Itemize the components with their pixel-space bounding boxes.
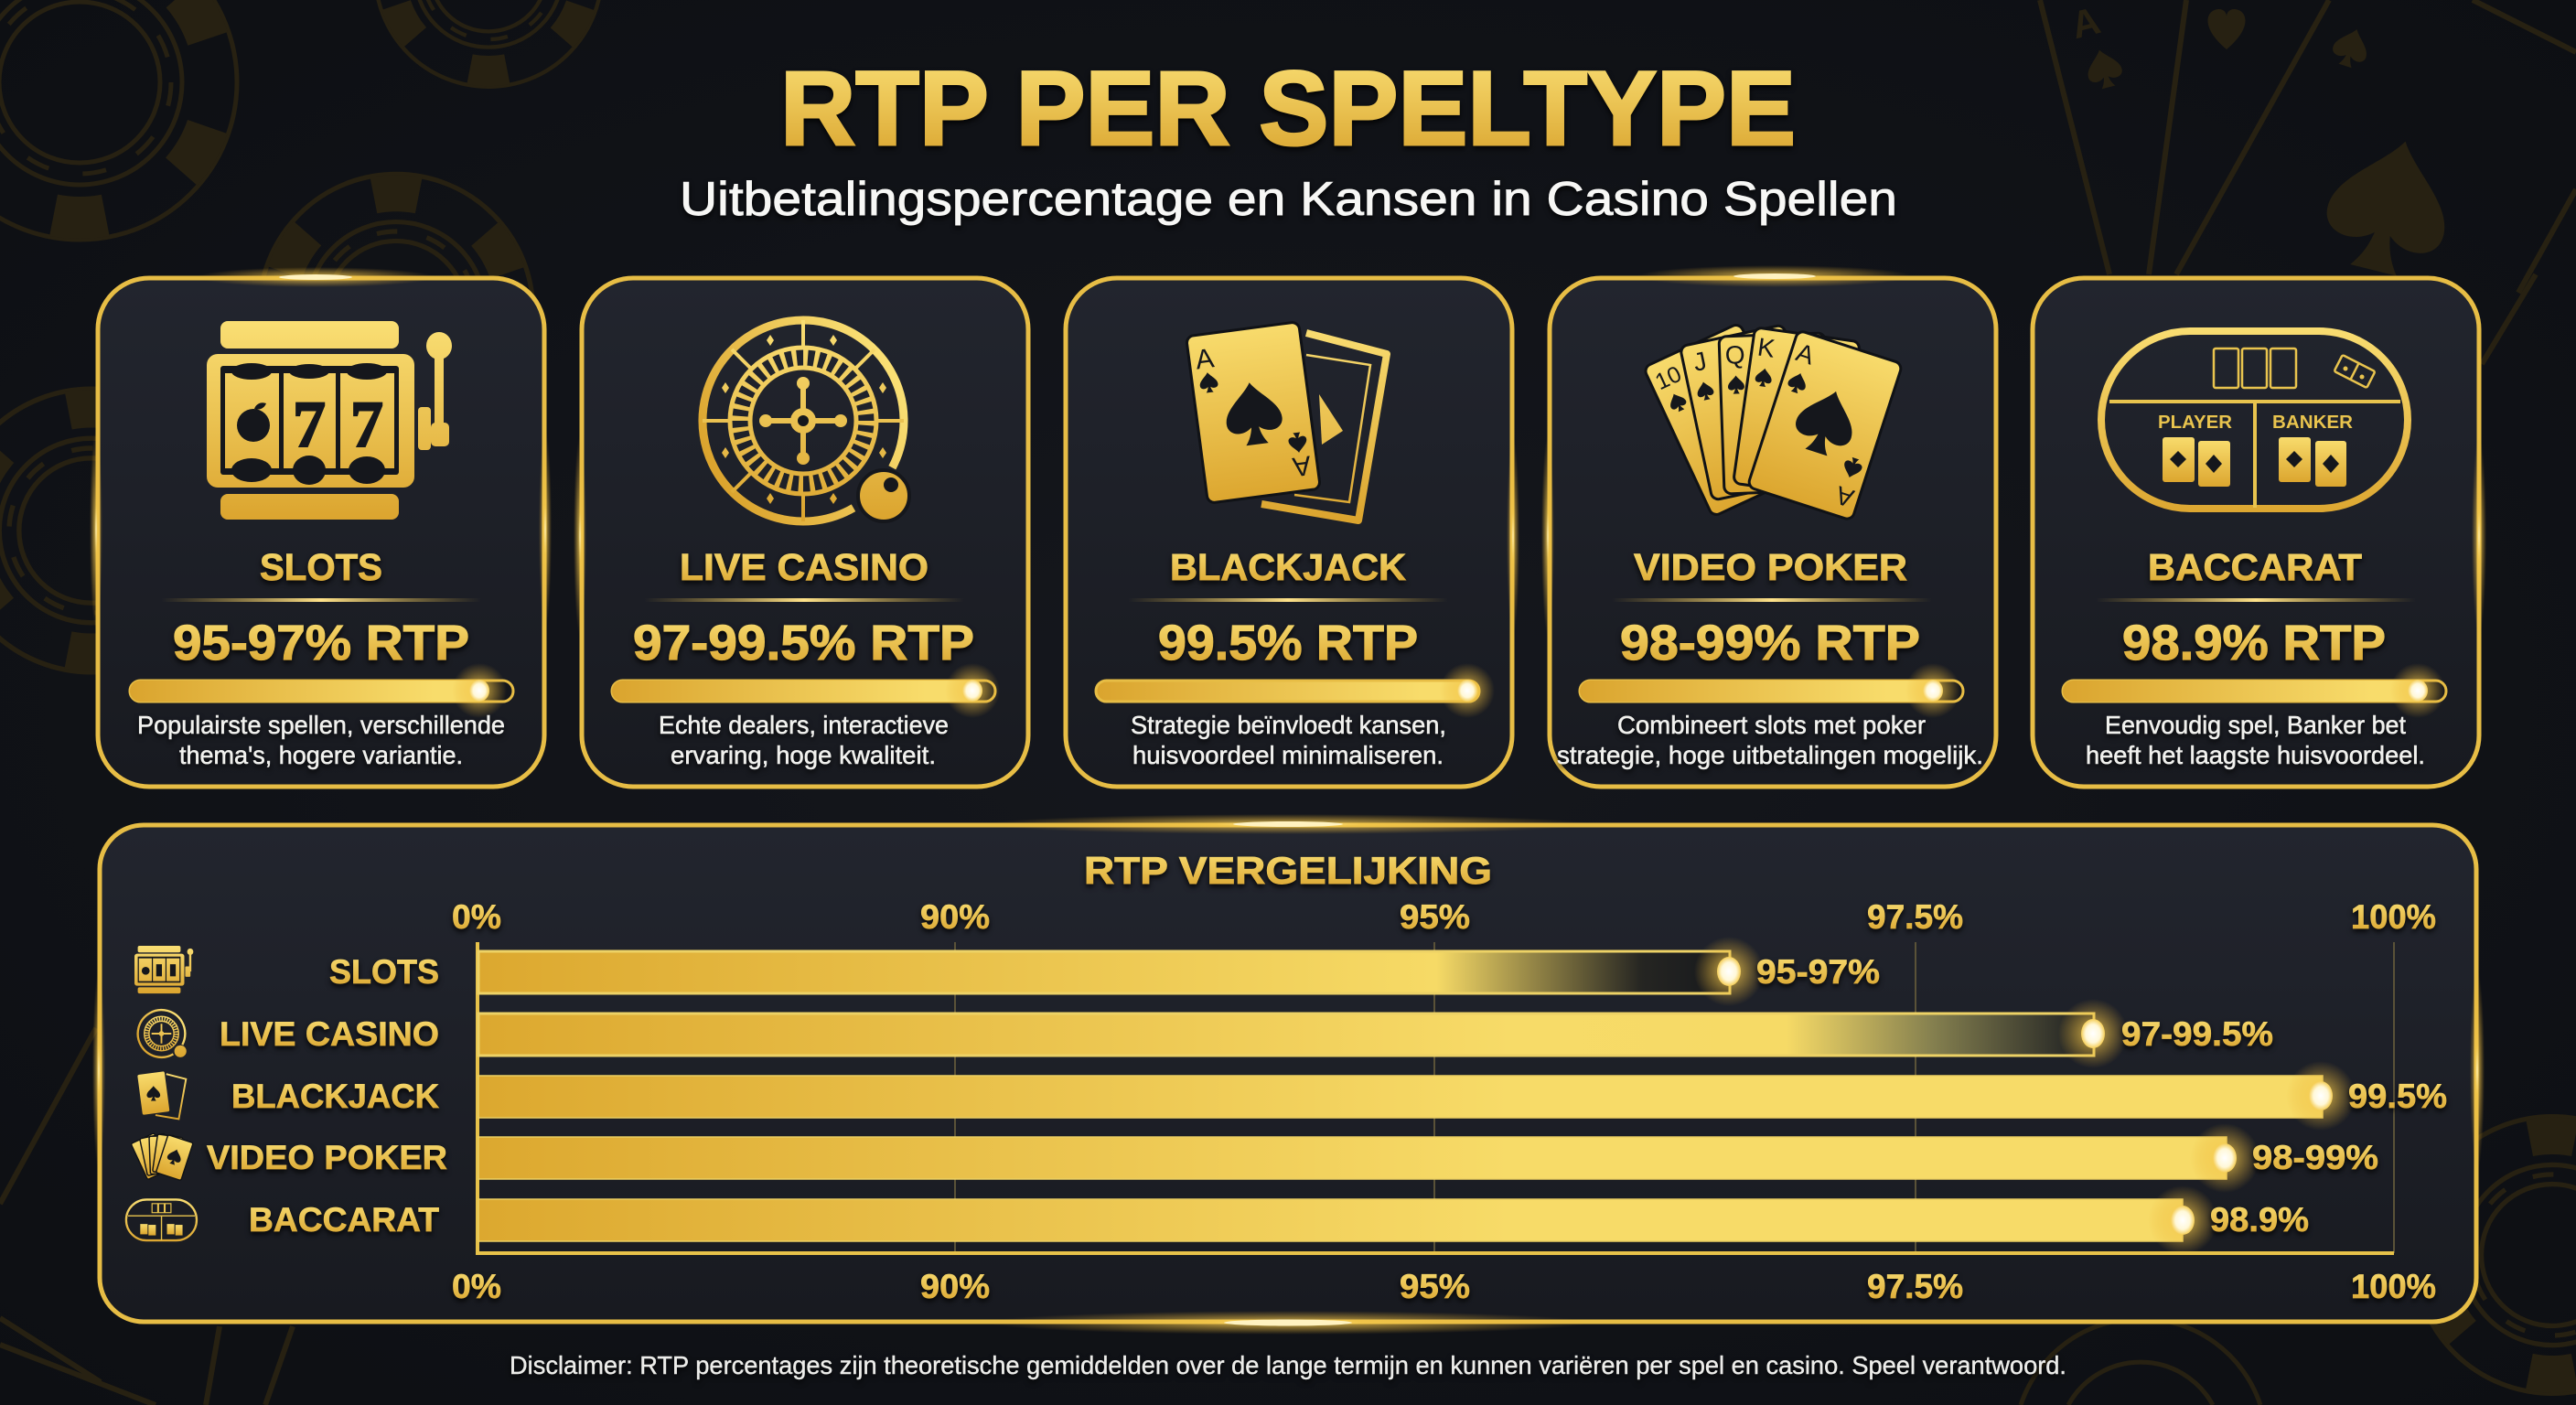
icon: baccarat table: BANKER [2272, 413, 2354, 433]
icon: baccarat table [2101, 331, 2408, 509]
bar value labels: 99.5% [2348, 1078, 2447, 1115]
description: Echte dealers, interactieve [659, 711, 949, 739]
top axis labels: 95% [1400, 898, 1470, 936]
chart title: RTP VERGELIJKING [1084, 849, 1492, 892]
top axis labels: 97.5% [1867, 898, 1963, 936]
description: strategie, hoge uitbetalingen mogelijk. [1557, 741, 1983, 769]
icon: poker hand [1643, 323, 1903, 520]
game name: SLOTS [260, 546, 382, 588]
bar value labels: 98-99% [2252, 1139, 2378, 1176]
panel: video poker [1541, 265, 1996, 787]
description [137, 711, 505, 769]
icon: small blackjack cards [137, 1071, 186, 1119]
icon: small baccarat table [126, 1199, 197, 1240]
subtitle: Uitbetalingspercentage en Kansen in Casino Spellen [680, 173, 1897, 226]
bar: live casino [478, 999, 2128, 1068]
icon: poker hand: K [1755, 333, 1777, 363]
icon: small roulette wheel [129, 1002, 194, 1066]
description [2086, 711, 2425, 769]
description: thema's, hogere variantie. [179, 741, 463, 769]
disclaimer: Disclaimer: RTP percentages zijn theoretische gemiddelden over de lange termijn en kunnen variëren per spel en casino. Speel verantwoord. [510, 1351, 2066, 1379]
progress bar [130, 663, 513, 718]
icon: blackjack cards: A [1291, 449, 1313, 482]
top axis labels [452, 898, 2436, 936]
panel: live casino [574, 278, 1028, 787]
RTP value: 95-97% RTP [173, 616, 469, 670]
icon: small slot machine [134, 946, 193, 993]
game name: LIVE CASINO [680, 546, 928, 588]
bar value labels: 95-97% [1756, 953, 1880, 991]
row labels: SLOTS [329, 953, 439, 991]
description: Populairste spellen, verschillende [137, 711, 505, 739]
bottom axis labels: 95% [1400, 1268, 1470, 1305]
RTP value: 98-99% RTP [1620, 616, 1920, 670]
icon: poker hand: 10 [1651, 361, 1685, 395]
row labels [207, 953, 447, 1239]
description: Eenvoudig spel, Banker bet [2105, 711, 2406, 739]
bottom axis labels: 97.5% [1867, 1268, 1963, 1305]
RTP value: 99.5% RTP [1158, 616, 1418, 670]
description [1557, 711, 1983, 769]
progress bar [612, 663, 1000, 718]
bar value labels [1756, 953, 2447, 1239]
description: Strategie beïnvloedt kansen, [1131, 711, 1446, 739]
RTP value: 98.9% RTP [2122, 616, 2386, 670]
row labels: LIVE CASINO [220, 1015, 439, 1053]
icon: baccarat table: PLAYER [2158, 413, 2233, 433]
row labels: BACCARAT [249, 1201, 439, 1239]
icon: blackjack cards: A [1194, 343, 1216, 376]
panel: RTP comparison chart [92, 814, 2485, 1335]
progress bar [1096, 663, 1495, 718]
icon: poker hand: A [1832, 480, 1857, 513]
icon: poker hand: Q [1724, 340, 1745, 370]
icon: slot machine: 7 [293, 388, 326, 461]
bottom axis labels: 100% [2351, 1268, 2436, 1305]
title: RTP PER SPELTYPE [780, 50, 1796, 167]
bar: baccarat [478, 1185, 2217, 1255]
progress bar [2063, 663, 2446, 718]
bottom axis labels [452, 1268, 2436, 1305]
bottom axis labels: 0% [452, 1268, 501, 1305]
panel: slots [90, 267, 552, 787]
row labels: VIDEO POKER [207, 1139, 447, 1176]
icon: slot machine: 7 [350, 388, 383, 461]
icon: blackjack cards [1186, 322, 1387, 520]
bar chart [478, 937, 2394, 1255]
description: huisvoordeel minimaliseren. [1132, 741, 1444, 769]
icon: roulette wheel [666, 284, 940, 558]
panel: baccarat [2033, 278, 2486, 787]
icon: poker hand: A [1793, 338, 1818, 370]
description: ervaring, hoge kwaliteit. [671, 741, 936, 769]
icon: slot machine [207, 321, 452, 520]
description: Combineert slots met poker [1617, 711, 1926, 739]
bar: blackjack [478, 1061, 2356, 1131]
description: heeft het laagste huisvoordeel. [2086, 741, 2425, 769]
progress bar [1580, 663, 1963, 718]
game name: VIDEO POKER [1634, 546, 1907, 588]
RTP value: 97-99.5% RTP [633, 616, 974, 670]
icon: poker hand: J [1690, 347, 1709, 377]
description [659, 711, 949, 769]
top axis labels: 90% [920, 898, 990, 936]
top axis labels: 0% [452, 898, 501, 936]
description [1131, 711, 1446, 769]
panel: blackjack [1066, 278, 1519, 787]
top axis labels: 100% [2351, 898, 2436, 936]
bar: video poker [478, 1123, 2259, 1193]
game name: BLACKJACK [1170, 546, 1406, 588]
bottom axis labels: 90% [920, 1268, 990, 1305]
game name: BACCARAT [2148, 546, 2362, 588]
bar value labels: 98.9% [2210, 1201, 2309, 1239]
bar value labels: 97-99.5% [2121, 1015, 2273, 1053]
bar: slots [478, 937, 1764, 1006]
icon: small poker hand [131, 1133, 193, 1181]
row labels: BLACKJACK [231, 1078, 439, 1115]
